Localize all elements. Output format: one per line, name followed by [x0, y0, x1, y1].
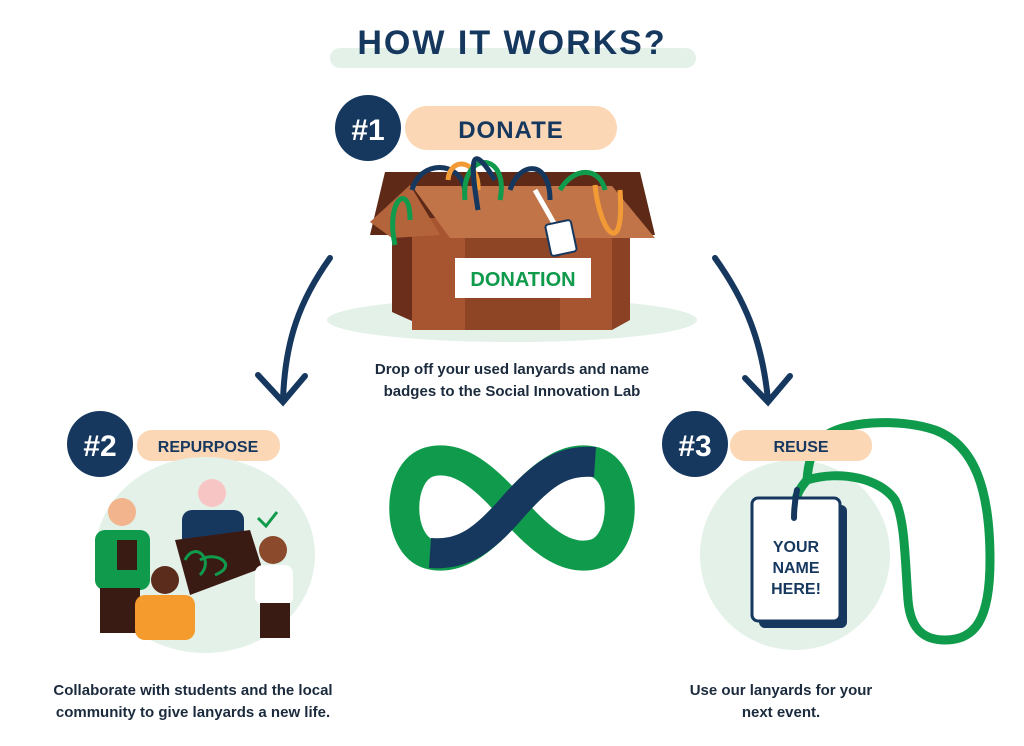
- step 2 badge: #2: [83, 430, 117, 463]
- illustration: name badge lanyard: NAME: [772, 560, 820, 577]
- illustration: donation box: [327, 159, 697, 342]
- step 3 text: Use our lanyards for your: [690, 682, 872, 699]
- step 2 badge: REPURPOSE: [158, 439, 259, 456]
- step 3 badge: #3: [678, 430, 712, 463]
- illustration: name badge lanyard: HERE!: [771, 581, 821, 598]
- step 2 text: [53, 682, 333, 721]
- step 3 badge: REUSE: [773, 439, 829, 456]
- illustration: name badge lanyard: [700, 423, 990, 650]
- step 2 text: Collaborate with students and the local: [53, 682, 333, 699]
- step 1 badge: DONATE: [458, 117, 564, 144]
- step 1 text: Drop off your used lanyards and name: [375, 361, 649, 378]
- step 1 badge: [335, 95, 617, 161]
- illustration: people collaborating: [95, 457, 315, 653]
- step 3 text: [690, 682, 872, 721]
- arrow right: [715, 258, 790, 402]
- step 3 badge: [662, 411, 872, 477]
- step 3 text: next event.: [742, 704, 820, 721]
- step 1 text: [375, 361, 649, 400]
- illustration: donation box: DONATION: [470, 269, 576, 291]
- illustration: name badge lanyard: YOUR: [773, 539, 820, 556]
- title: HOW IT WORKS?: [357, 24, 667, 62]
- step 1 badge: #1: [351, 114, 385, 147]
- step 2 badge: [67, 411, 280, 477]
- arrow left: [258, 258, 330, 402]
- step 2 text: community to give lanyards a new life.: [56, 704, 330, 721]
- step 1 text: badges to the Social Innovation Lab: [384, 383, 640, 400]
- icon: infinity: [404, 460, 620, 556]
